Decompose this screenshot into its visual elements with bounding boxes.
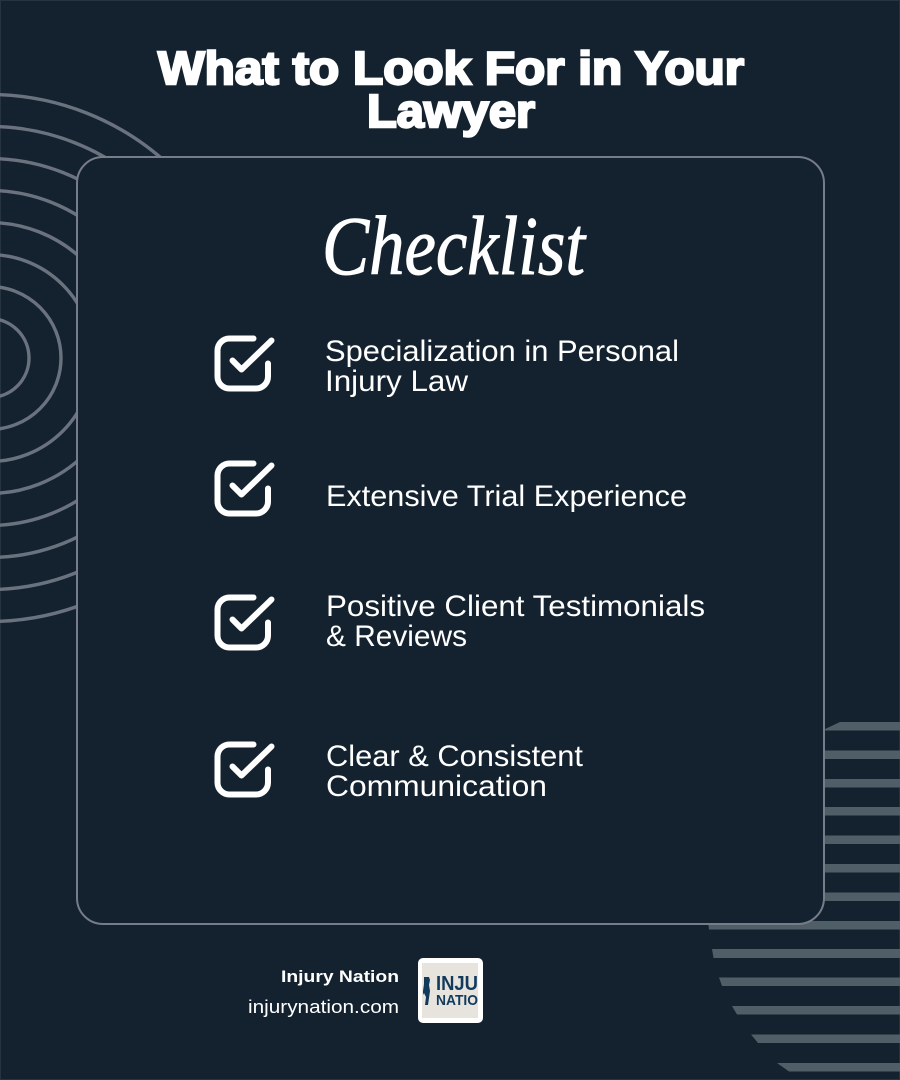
item text: Extensive Trial Experience: [326, 480, 687, 513]
item text: [326, 740, 584, 803]
item text: Injury Law: [325, 365, 468, 398]
item text: & Reviews: [326, 620, 467, 653]
heading: Checklist: Checklist: [322, 200, 587, 293]
logo wordmark: INJU: [436, 973, 478, 995]
item text: [326, 590, 705, 653]
logo wordmark: NATIO: [436, 992, 478, 1009]
checklist item 2: [218, 464, 687, 514]
icon: checkbox: [218, 464, 272, 514]
title: What to Look For in Your: [158, 42, 744, 94]
icon: figure: [423, 977, 430, 1005]
logo wordmark: [436, 973, 478, 1009]
title: Lawyer: [367, 85, 535, 137]
concentric circles decoration: [0, 94, 253, 622]
checklist item 3: [218, 590, 705, 653]
item text: Clear & Consistent: [326, 740, 584, 773]
footer brand text: Injury Nation: [281, 967, 399, 986]
panel: checklist card: [77, 157, 824, 924]
checklist item 4: [218, 740, 584, 803]
item text: Specialization in Personal: [325, 335, 679, 368]
icon: checkbox: [218, 338, 272, 389]
checklist item 1: [218, 335, 679, 398]
icon: checkbox: [218, 598, 272, 648]
title: [158, 42, 744, 137]
item text: [325, 335, 679, 398]
item text: Positive Client Testimonials: [326, 590, 705, 623]
item text: Communication: [326, 770, 547, 803]
footer brand text: [248, 967, 399, 1017]
striped decoration: [708, 722, 900, 1072]
footer brand text: injurynation.com: [248, 997, 399, 1017]
icon: checkbox: [218, 744, 272, 794]
logo: [418, 958, 483, 1023]
